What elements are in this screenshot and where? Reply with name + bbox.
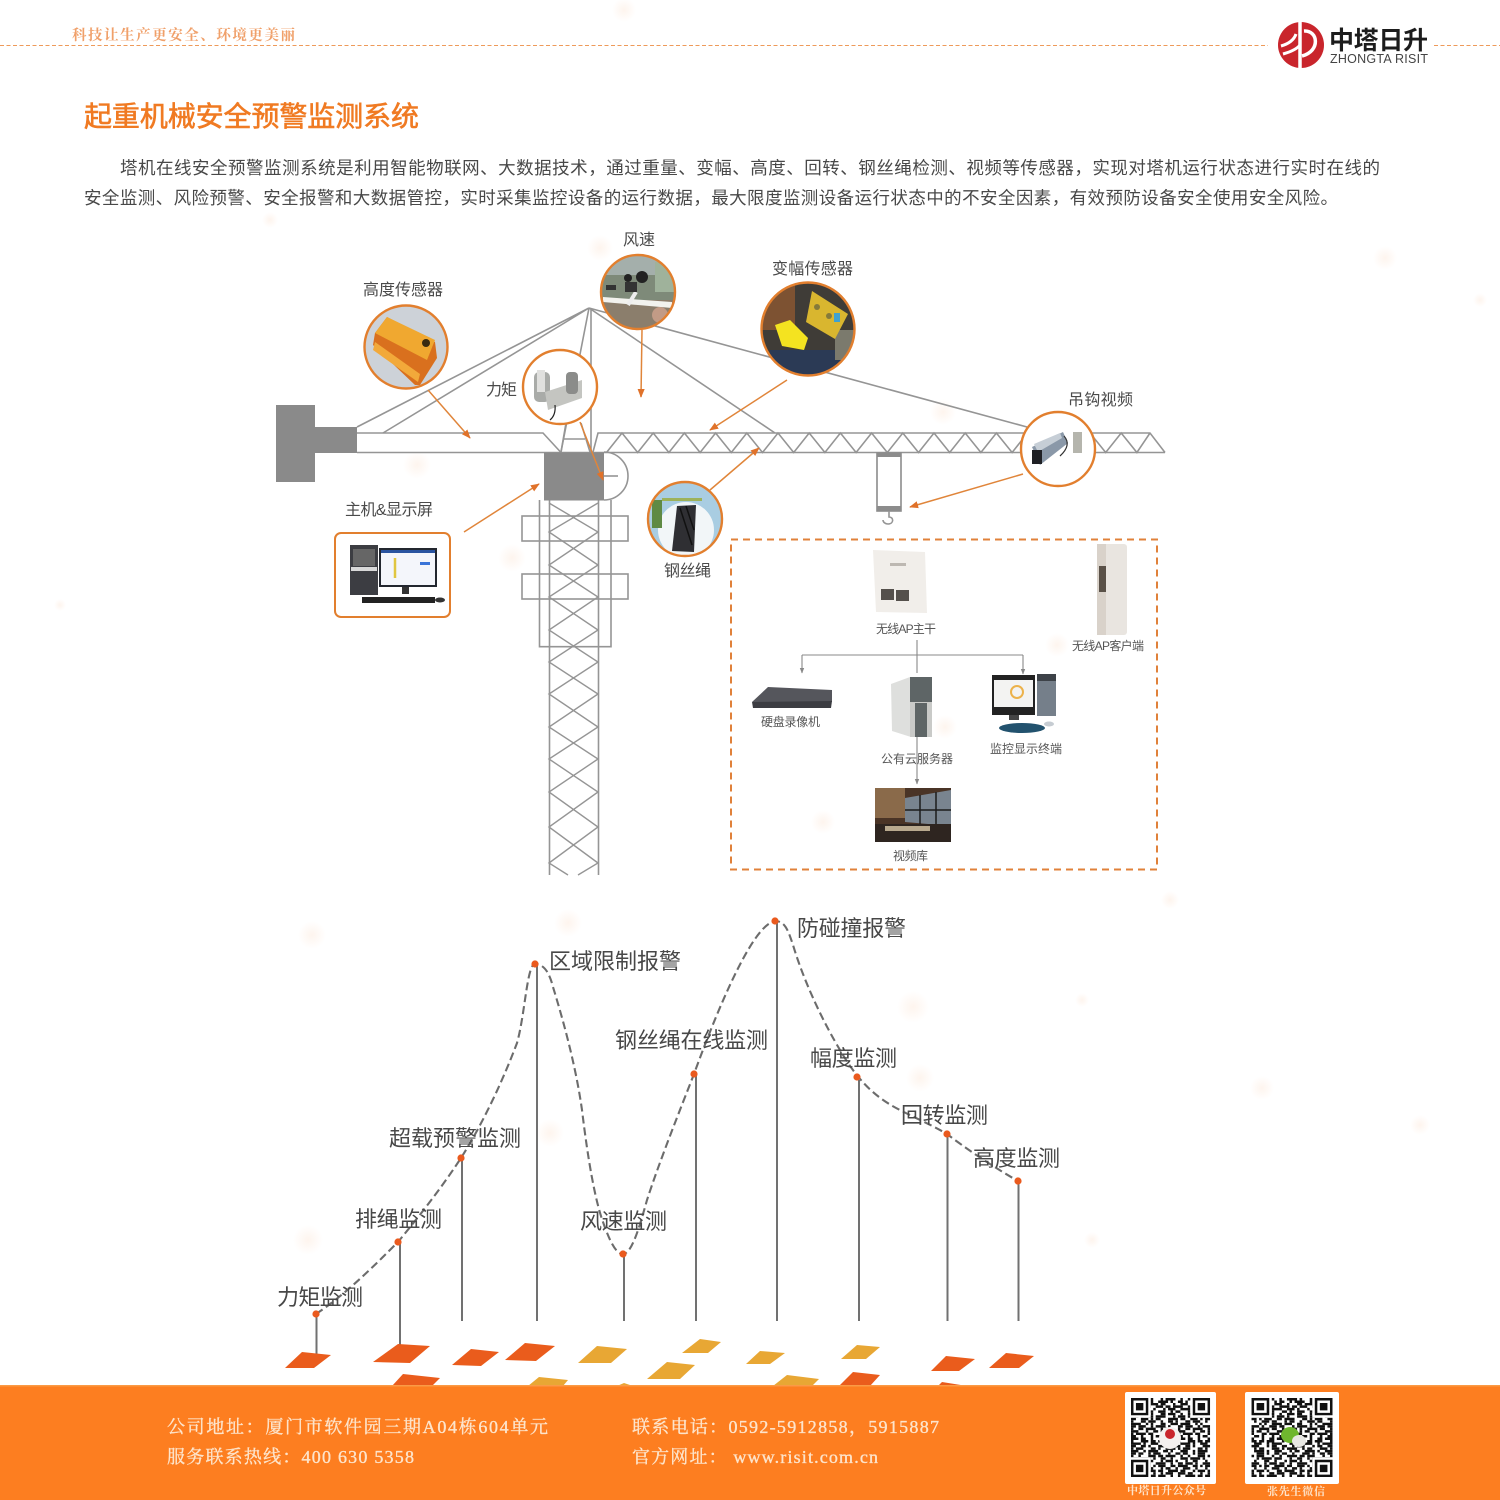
footer contact text: 官方网址： www.risit.com.cn <box>632 1447 878 1467</box>
logo english name: ZHONGTA RISIT <box>1330 52 1428 66</box>
chart labels: 风速监测 <box>580 1209 667 1234</box>
label: luffing sensor: 变幅传感器 <box>772 260 853 278</box>
icon: anemometer photo <box>600 255 677 330</box>
front jib truss <box>593 433 1165 452</box>
QR code: official account <box>1125 1392 1216 1484</box>
chart labels: 区域限制报警 <box>549 949 681 974</box>
hook block <box>877 453 901 524</box>
sensor: torque <box>486 350 597 424</box>
label: public cloud server: 公有云服务器 <box>881 751 953 766</box>
crane cab <box>544 452 628 500</box>
footer band <box>0 1385 1500 1500</box>
panel: network system box <box>731 540 1157 870</box>
footer contact text: 联系电话：0592-5912858，5915887 <box>632 1417 939 1437</box>
chart labels <box>277 916 1060 1310</box>
QR captions <box>1127 1483 1325 1498</box>
arrows <box>428 330 1023 532</box>
label: AP client: 无线AP客户端 <box>1072 638 1144 653</box>
data points <box>312 917 1022 1318</box>
sensor: height <box>363 281 448 388</box>
QR code: personal WeChat <box>1245 1392 1339 1484</box>
dashed frame <box>731 540 1157 870</box>
chart labels: 排绳监测 <box>355 1207 442 1232</box>
tagline: 科技让生产更安全、环境更美丽 <box>72 26 295 44</box>
icon: torque pin <box>523 350 597 424</box>
icon: luffing sensor photo <box>760 280 860 380</box>
icon: AP client <box>1097 544 1127 635</box>
icon: computer <box>350 545 445 603</box>
label: torque: 力矩 <box>486 381 517 399</box>
logo wordmark: 中塔日升 <box>1329 27 1428 55</box>
label: host and display: 主机&显示屏 <box>345 501 433 519</box>
footer background <box>0 1385 1500 1500</box>
sensor: wire rope <box>648 482 722 580</box>
background speckles <box>54 0 1487 1255</box>
footer contact text: 公司地址：厦门市软件园三期A04栋604单元 <box>167 1417 548 1437</box>
label: wind speed: 风速 <box>623 231 655 249</box>
chart labels: 超载预警监测 <box>389 1126 521 1151</box>
chart labels: 力矩监测 <box>277 1285 363 1310</box>
intro paragraph: 塔机在线安全预警监测系统是利用智能物联网、大数据技术，通过重量、变幅、高度、回转、钢丝绳检测、视频等传感器，实现对塔机运行状态进行实时在线的 <box>120 158 1380 178</box>
floor tiles <box>285 1339 1034 1386</box>
intro paragraph: 安全监测、风险预警、安全报警和大数据管控，实时采集监控设备的运行数据，最大限度监测设备运行状态中的不安全因素，有效预防设备安全使用安全风险。 <box>84 188 1338 208</box>
panel: host image <box>335 533 450 617</box>
footer contact text: 服务联系热线：400 630 5358 <box>167 1447 414 1467</box>
crane rear jib <box>357 433 1165 452</box>
label: wireless AP trunk: 无线AP主干 <box>876 622 936 636</box>
crane counterweight <box>276 405 357 482</box>
icon: wall AP <box>873 550 927 613</box>
mast cap <box>561 423 590 452</box>
crane tower mast <box>522 500 628 875</box>
header dashed line <box>0 44 1500 46</box>
label: hook video: 吊钩视频 <box>1068 391 1133 409</box>
icon: video wall <box>875 788 951 842</box>
logo mark <box>1278 22 1324 68</box>
label: wire rope: 钢丝绳 <box>664 562 711 580</box>
sensor: hook video <box>1021 391 1133 486</box>
host and display <box>335 501 450 617</box>
icon: camera <box>1021 412 1095 486</box>
label: monitor terminal: 监控显示终端 <box>990 741 1062 756</box>
company logo <box>1278 22 1428 68</box>
title: 起重机械安全预警监测系统 <box>84 101 419 132</box>
icon: server tower <box>891 677 932 737</box>
intro paragraph <box>84 158 1380 208</box>
label: video library: 视频库 <box>893 848 928 863</box>
chart labels: 防碰撞报警 <box>797 916 906 941</box>
sensor: wind speed <box>600 231 677 330</box>
chart labels: 幅度监测 <box>810 1046 897 1071</box>
icon: wire rope photo <box>648 482 722 558</box>
crane tie ropes <box>357 308 1027 452</box>
label: height sensor: 高度传感器 <box>363 281 443 299</box>
QR captions: 张先生微信 <box>1267 1484 1325 1498</box>
footer contact text <box>167 1417 939 1467</box>
chart: monitoring curve <box>277 916 1060 1386</box>
QR captions: 中塔日升公众号 <box>1127 1483 1206 1497</box>
dashed curve <box>316 921 1018 1314</box>
chart labels: 钢丝绳在线监测 <box>615 1028 768 1053</box>
icon: monitor terminal <box>992 674 1056 733</box>
icon: hard disk recorder <box>752 687 832 708</box>
stems <box>316 921 1018 1355</box>
icon: height sensor <box>364 306 448 388</box>
chart labels: 回转监测 <box>901 1103 988 1128</box>
network links <box>802 640 1023 784</box>
label: hard disk recorder: 硬盘录像机 <box>761 714 820 729</box>
sensor: luffing <box>760 260 860 380</box>
chart labels: 高度监测 <box>973 1146 1060 1171</box>
